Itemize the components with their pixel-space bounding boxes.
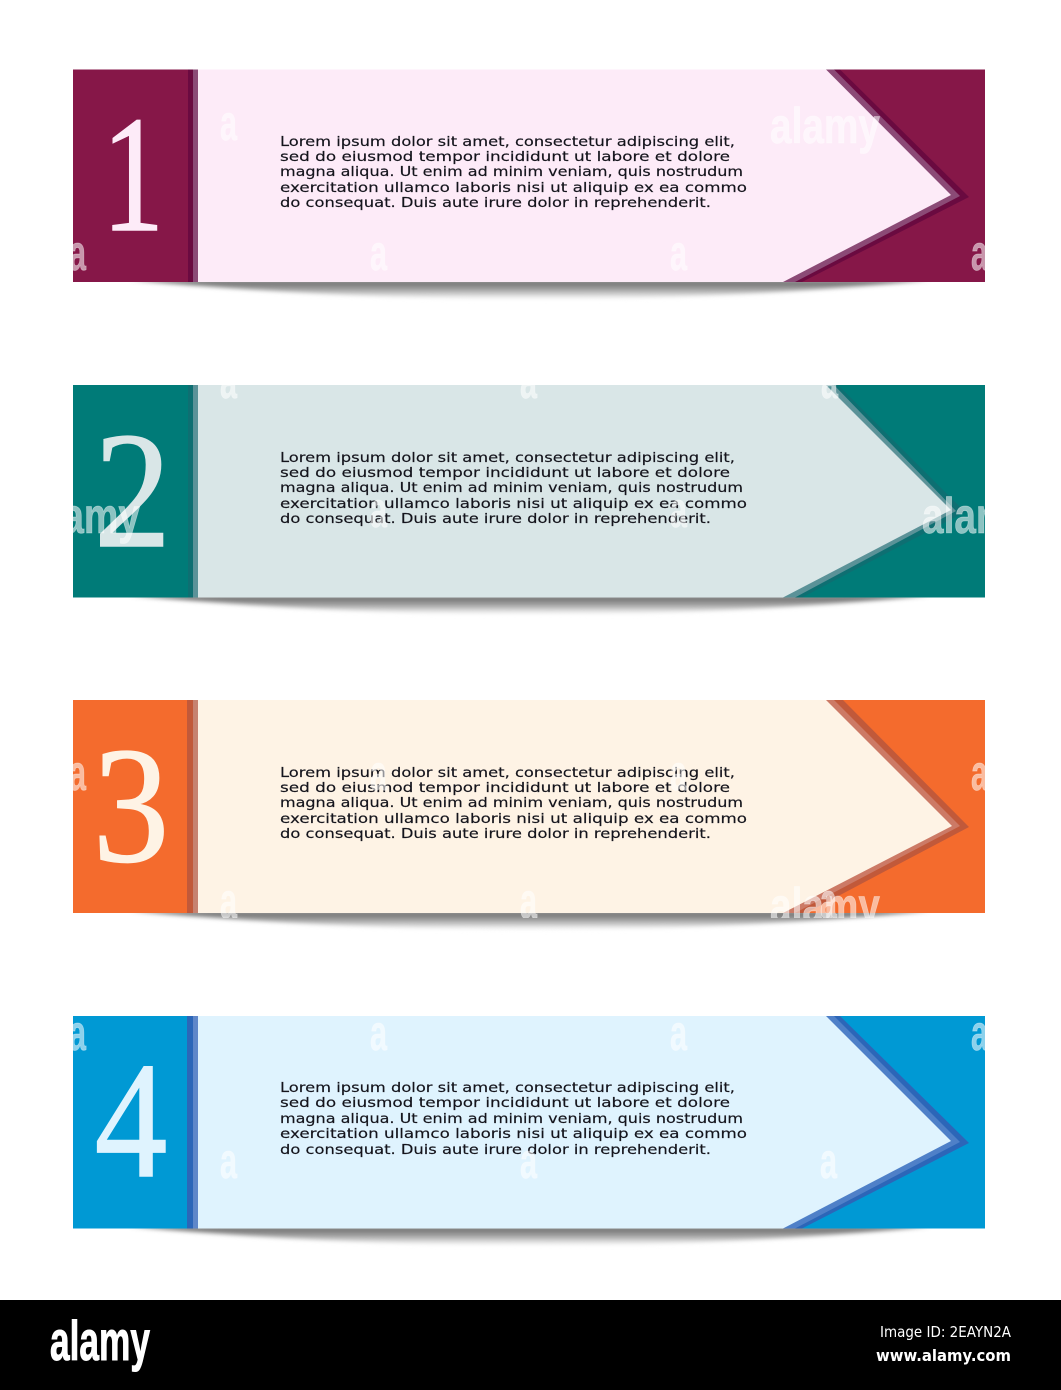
banner 4 watermarks [73, 1022, 985, 1179]
banner 2 watermarks: a [821, 353, 839, 409]
banner 4 watermarks: a [670, 1005, 688, 1061]
banner 2 watermarks: alamy [30, 488, 140, 544]
banner 4 light arrow panel [198, 1016, 951, 1228]
banner 3 watermarks: alamy [770, 878, 880, 934]
footer bar [0, 1300, 1061, 1390]
banner 2 light arrow panel [198, 385, 951, 598]
banner 3 watermarks: a [520, 873, 538, 929]
banner 4 deep side strip [187, 1016, 194, 1228]
banner 3 watermarks: a [220, 873, 238, 929]
banner 3 translucent arrow edge [783, 700, 960, 913]
banner 2 body text: Lorem ipsum dolor sit amet, consectetur adipiscing elit, [280, 450, 735, 466]
banner 3 dark background [73, 700, 985, 913]
banner 2 [73, 385, 985, 614]
banner 4 dark background [73, 1016, 985, 1228]
banner 2 deep arrow edge [783, 385, 965, 598]
banner 4 body text: magna aliqua. Ut enim ad minim veniam, quis nostrudum [280, 1111, 743, 1127]
banner 4 body text: do consequat. Duis aute irure dolor in reprehenderit. [280, 1142, 711, 1158]
banner 2 dark background [73, 385, 985, 598]
banner 2 body text: do consequat. Duis aute irure dolor in reprehenderit. [280, 511, 711, 527]
banner 2 watermarks: a [370, 482, 388, 538]
banner 1 body text [280, 134, 747, 211]
shadow under banner 2 [130, 596, 930, 614]
website: www.alamy.com [876, 1346, 1011, 1365]
banner 2 watermarks: a [220, 353, 238, 409]
banner 3 watermarks: a [971, 745, 989, 801]
banner 2 body text: magna aliqua. Ut enim ad minim veniam, quis nostrudum [280, 480, 743, 496]
banner 1 watermarks [73, 106, 985, 271]
banner 4 watermarks: a [520, 1133, 538, 1189]
banner 4 watermarks: a [820, 1133, 838, 1189]
banner 1 deep arrow edge [783, 70, 969, 282]
banner 1 dark background [73, 70, 985, 282]
banner 1 watermarks: a [670, 225, 688, 281]
image id: Image ID: 2EAYN2A [880, 1323, 1012, 1341]
banner 4 body text: Lorem ipsum dolor sit amet, consectetur adipiscing elit, [280, 1080, 735, 1096]
banner 4 translucent side strip [193, 1016, 199, 1228]
number 3: 3 [93, 714, 169, 897]
banner 3 body text: do consequat. Duis aute irure dolor in reprehenderit. [280, 826, 711, 842]
banner 3 light arrow panel [198, 700, 952, 913]
shadow under banner 1 [130, 280, 930, 299]
banner 3 watermarks: a [69, 745, 87, 801]
banner 3 deep arrow edge [783, 700, 969, 913]
banner 4 deep arrow edge [783, 1016, 969, 1228]
banner 1 light arrow panel [198, 70, 951, 282]
banner 2 body text: sed do eiusmod tempor incididunt ut labore et dolore [280, 465, 730, 481]
number 2: 2 [94, 398, 171, 582]
banner 3 body text: exercitation ullamco laboris nisi ut aliquip ex ea commo [280, 811, 747, 827]
banner 1 body text: exercitation ullamco laboris nisi ut aliquip ex ea commo [280, 180, 747, 196]
banner 2 body text: exercitation ullamco laboris nisi ut aliquip ex ea commo [280, 496, 747, 512]
banner 3 body text: sed do eiusmod tempor incididunt ut labore et dolore [280, 780, 730, 796]
banner 4 watermarks: a [971, 1005, 989, 1061]
banner 2 translucent arrow edge [783, 385, 956, 598]
banner 3 [69, 700, 989, 934]
banner 2 watermarks: alamy [922, 488, 1032, 544]
banner 4 body text: sed do eiusmod tempor incididunt ut labore et dolore [280, 1095, 730, 1111]
banner 2 watermarks: a [670, 482, 688, 538]
banner 1 watermarks: a [971, 225, 989, 281]
banner 1 [69, 70, 989, 299]
shadow under banner 3 [130, 911, 930, 930]
footer logo: alamy [50, 1309, 150, 1372]
banner 4 translucent arrow edge [783, 1016, 960, 1228]
banner 1 body text: Lorem ipsum dolor sit amet, consectetur adipiscing elit, [280, 134, 735, 150]
banner 3 body text: magna aliqua. Ut enim ad minim veniam, quis nostrudum [280, 795, 743, 811]
banner 3 body text: Lorem ipsum dolor sit amet, consectetur adipiscing elit, [280, 765, 735, 781]
banner 1 deep side strip [188, 70, 194, 282]
banner 1 watermarks: a [69, 225, 87, 281]
banner 3 watermarks: a [370, 745, 388, 801]
banner 3 body text [280, 765, 747, 842]
banner 1 watermarks: alamy [770, 98, 880, 154]
banner 3 deep side strip [187, 700, 194, 913]
banner 2 watermarks [73, 385, 985, 544]
banner 1 translucent arrow edge [783, 70, 960, 282]
banner 1 body text: sed do eiusmod tempor incididunt ut labore et dolore [280, 149, 730, 165]
banner 2 body text [280, 450, 747, 527]
banner 1 watermarks: a [370, 225, 388, 281]
banner 2 translucent side strip [193, 385, 199, 598]
banner 1 translucent side strip [193, 70, 199, 282]
banner 3 watermarks: a [670, 745, 688, 801]
banner 3 translucent side strip [193, 700, 199, 913]
shadow under banner 4 [130, 1226, 930, 1245]
number 4: 4 [95, 1028, 167, 1212]
number 1: 1 [102, 82, 164, 266]
banner 4 body text: exercitation ullamco laboris nisi ut aliquip ex ea commo [280, 1126, 747, 1142]
banner 1 watermarks: a [220, 95, 238, 151]
banner 4 watermarks: a [69, 1005, 87, 1061]
banner 4 watermarks: a [220, 1133, 238, 1189]
banner 4 body text [280, 1080, 747, 1158]
banner 1 body text: do consequat. Duis aute irure dolor in reprehenderit. [280, 195, 711, 211]
banner 4 [69, 1005, 989, 1245]
banner 4 watermarks: a [370, 1005, 388, 1061]
banner 2 watermarks: a [520, 353, 538, 409]
banner 3 watermarks: a [820, 873, 838, 929]
banner 2 deep side strip [188, 385, 194, 598]
banner 3 watermarks [73, 762, 985, 918]
banner 1 body text: magna aliqua. Ut enim ad minim veniam, quis nostrudum [280, 164, 743, 180]
